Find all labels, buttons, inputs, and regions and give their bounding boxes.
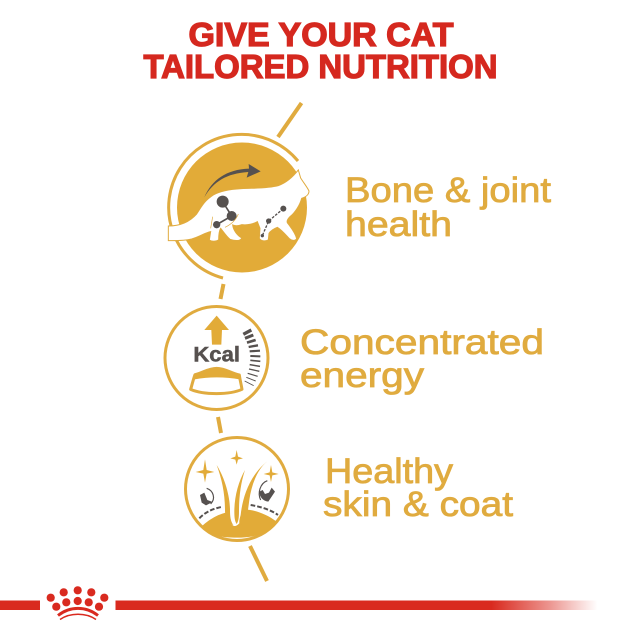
icon: skin and coat [186, 438, 288, 540]
title: TAILORED NUTRITION [144, 49, 498, 86]
label: concentrated energy [300, 323, 544, 395]
label: concentrated energy: energy [300, 356, 425, 395]
title: GIVE YOUR CAT [188, 17, 454, 54]
label: healthy skin and coat: Healthy [325, 452, 454, 491]
label: healthy skin and coat [323, 452, 513, 524]
label: bone and joint health: Bone & joint [345, 171, 551, 210]
title [144, 17, 498, 86]
label: concentrated energy: Concentrated [300, 323, 544, 362]
label: bone and joint health: health [345, 205, 452, 244]
footer bar right [116, 600, 598, 610]
logo: crown [47, 586, 108, 620]
icon: kcal energy [165, 306, 268, 410]
label: bone and joint health [345, 171, 551, 244]
icon: kcal energy: Kcal [193, 344, 240, 367]
label: healthy skin and coat: skin & coat [323, 485, 513, 524]
connecting line segments [218, 103, 302, 581]
footer bar left [0, 600, 40, 610]
icon: cat bone and joint [168, 134, 309, 278]
